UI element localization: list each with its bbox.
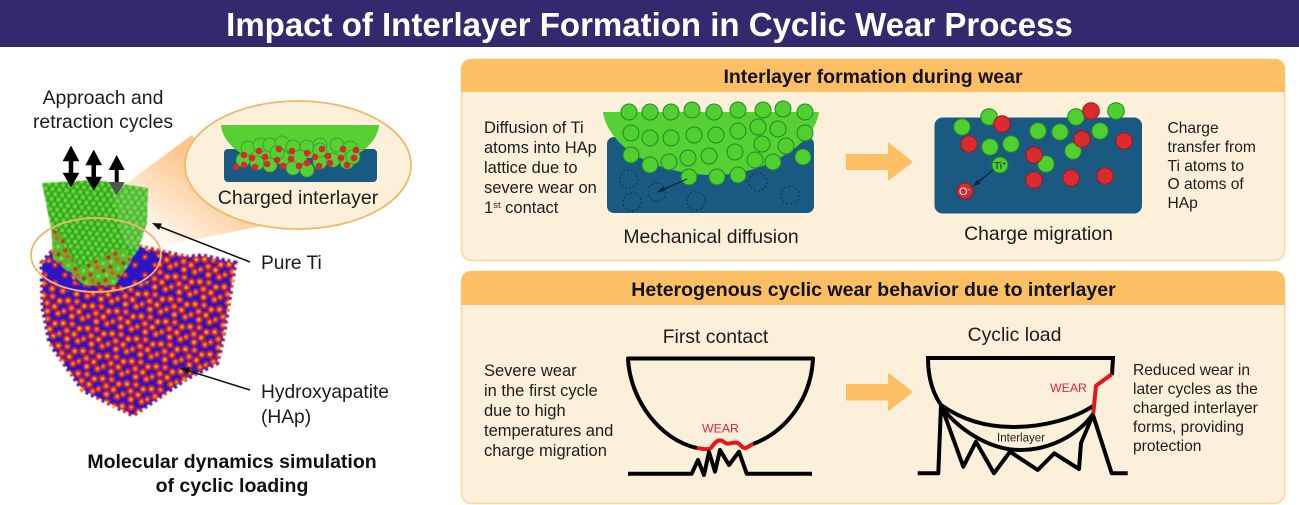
diffusion arrow: [657, 179, 687, 192]
label: hydroxyapatite: (HAp): [261, 407, 311, 428]
Ti indenter: [603, 112, 819, 175]
arrow: pure Ti pointer: [152, 223, 250, 262]
text: severe wear description: charge migration: [484, 442, 607, 460]
label: hydroxyapatite: Hydroxyapatite: [261, 382, 389, 403]
titanium tip: [42, 180, 148, 282]
blue interface patches: [42, 262, 95, 292]
icon: double arrow 2: [86, 150, 102, 190]
caption: molecular dynamics: Molecular dynamics simulation: [87, 451, 377, 473]
green atoms: [236, 136, 360, 177]
lower arc: [941, 407, 1093, 450]
text: charge transfer description: transfer from: [1168, 139, 1256, 156]
label: wear: WEAR: [702, 422, 739, 436]
upper arc: [941, 405, 1093, 427]
text: reduced wear description: later cycles as the: [1133, 381, 1258, 398]
diagram: first contact: [628, 358, 813, 475]
worn edge: [1093, 374, 1112, 413]
text: severe wear description: Severe wear: [484, 362, 577, 380]
red atoms: [233, 146, 359, 170]
blue interface patch right: [116, 247, 160, 290]
text: severe wear description: due to high: [484, 402, 566, 420]
charge transfer arrow: [973, 170, 993, 186]
tip shaded side: [110, 184, 148, 250]
diagram: mechanical diffusion: [603, 101, 819, 213]
label: pure Ti: Pure Ti: [261, 253, 322, 274]
worn edge: [697, 440, 753, 449]
vacant sites: [620, 170, 799, 211]
label: charge migration: Charge migration: [964, 223, 1113, 245]
label: cyclic load: Cyclic load: [968, 324, 1061, 346]
panel header: [461, 271, 1285, 305]
atomistic model: [42, 180, 235, 415]
heading: Interlayer formation during wear: [723, 66, 1023, 88]
panel: interlayer formation during wear: [461, 59, 1285, 260]
bowl: [628, 358, 813, 448]
label: Ti ion: Ti: [994, 161, 1002, 172]
rough surface: [628, 450, 812, 475]
text: diffusion description: atoms into HAp: [484, 139, 597, 157]
rough surface: [918, 405, 1128, 473]
text: diffusion description: contact: [501, 199, 559, 217]
text: diffusion description: 1: [484, 199, 559, 217]
panel body: [462, 272, 1284, 504]
title banner: [0, 0, 1299, 47]
Ti atoms: [621, 101, 813, 185]
label: charged interlayer: Charged interlayer: [218, 187, 379, 209]
icon: double arrow 3: [109, 155, 125, 195]
icon: double arrow 1: [63, 146, 79, 187]
text: diffusion description: Diffusion of Ti: [484, 119, 584, 137]
callout cone: [127, 135, 262, 250]
text: reduced wear description: protection: [1133, 438, 1201, 455]
substrate block: [224, 149, 377, 182]
HAp block: [607, 137, 814, 213]
label: O ion: -: [968, 187, 971, 194]
arrow: process flow: [846, 372, 913, 412]
mixed interface left: [51, 226, 84, 278]
green cap: [221, 125, 379, 158]
label: Ti ion: +: [1002, 161, 1006, 168]
text: reduced wear description: charged interlayer: [1133, 400, 1258, 417]
mixed interface centre: [72, 248, 132, 285]
hydroxyapatite block: [42, 247, 235, 415]
label: approach and retraction cycles: retraction cycles: [33, 111, 173, 133]
text: reduced wear description: Reduced wear in: [1133, 362, 1250, 379]
callout: charged interlayer: [185, 101, 411, 229]
bowl outline: [928, 358, 1113, 405]
title banner: Impact of Interlayer Formation in Cyclic Wear Process: [226, 6, 1073, 43]
label: interlayer: Interlayer: [997, 432, 1045, 444]
text: reduced wear description: forms, providing: [1133, 419, 1244, 436]
label: mechanical diffusion: Mechanical diffusion: [623, 226, 799, 248]
label: first contact: First contact: [663, 326, 769, 348]
panel: heterogenous cyclic wear behavior: [461, 271, 1285, 504]
panel header: [461, 59, 1285, 92]
HAp block: [934, 118, 1142, 214]
text: diffusion description: st: [493, 200, 501, 211]
caption: molecular dynamics: of cyclic loading: [156, 475, 308, 497]
label: O ion: O: [959, 186, 968, 198]
text: severe wear description: in the first cycle: [484, 382, 598, 400]
text: severe wear description: temperatures and: [484, 422, 613, 440]
text: charge transfer description: O atoms of: [1168, 176, 1244, 193]
diagram: cyclic load: [918, 358, 1128, 473]
O atoms: [957, 103, 1132, 199]
text: charge transfer description: Charge: [1168, 120, 1219, 137]
heading: Heterogenous cyclic wear behavior due to interlayer: [631, 279, 1116, 301]
panel: molecular dynamics simulation: [31, 87, 411, 497]
text: charge transfer description: Ti atoms to: [1168, 158, 1244, 175]
diagram: charge migration: [934, 103, 1142, 214]
label: approach and retraction cycles: Approach and: [43, 87, 163, 109]
arrow: hydroxyapatite pointer: [180, 368, 250, 390]
arrow: process flow: [846, 142, 913, 181]
text: charge transfer description: HAp: [1168, 195, 1198, 212]
panel body: [462, 60, 1284, 260]
Ti atoms: [954, 103, 1124, 173]
text: diffusion description: lattice due to: [484, 159, 578, 177]
text: diffusion description: severe wear on: [484, 179, 597, 197]
label: wear: WEAR: [1050, 381, 1087, 395]
interlayer ring: [31, 218, 161, 292]
